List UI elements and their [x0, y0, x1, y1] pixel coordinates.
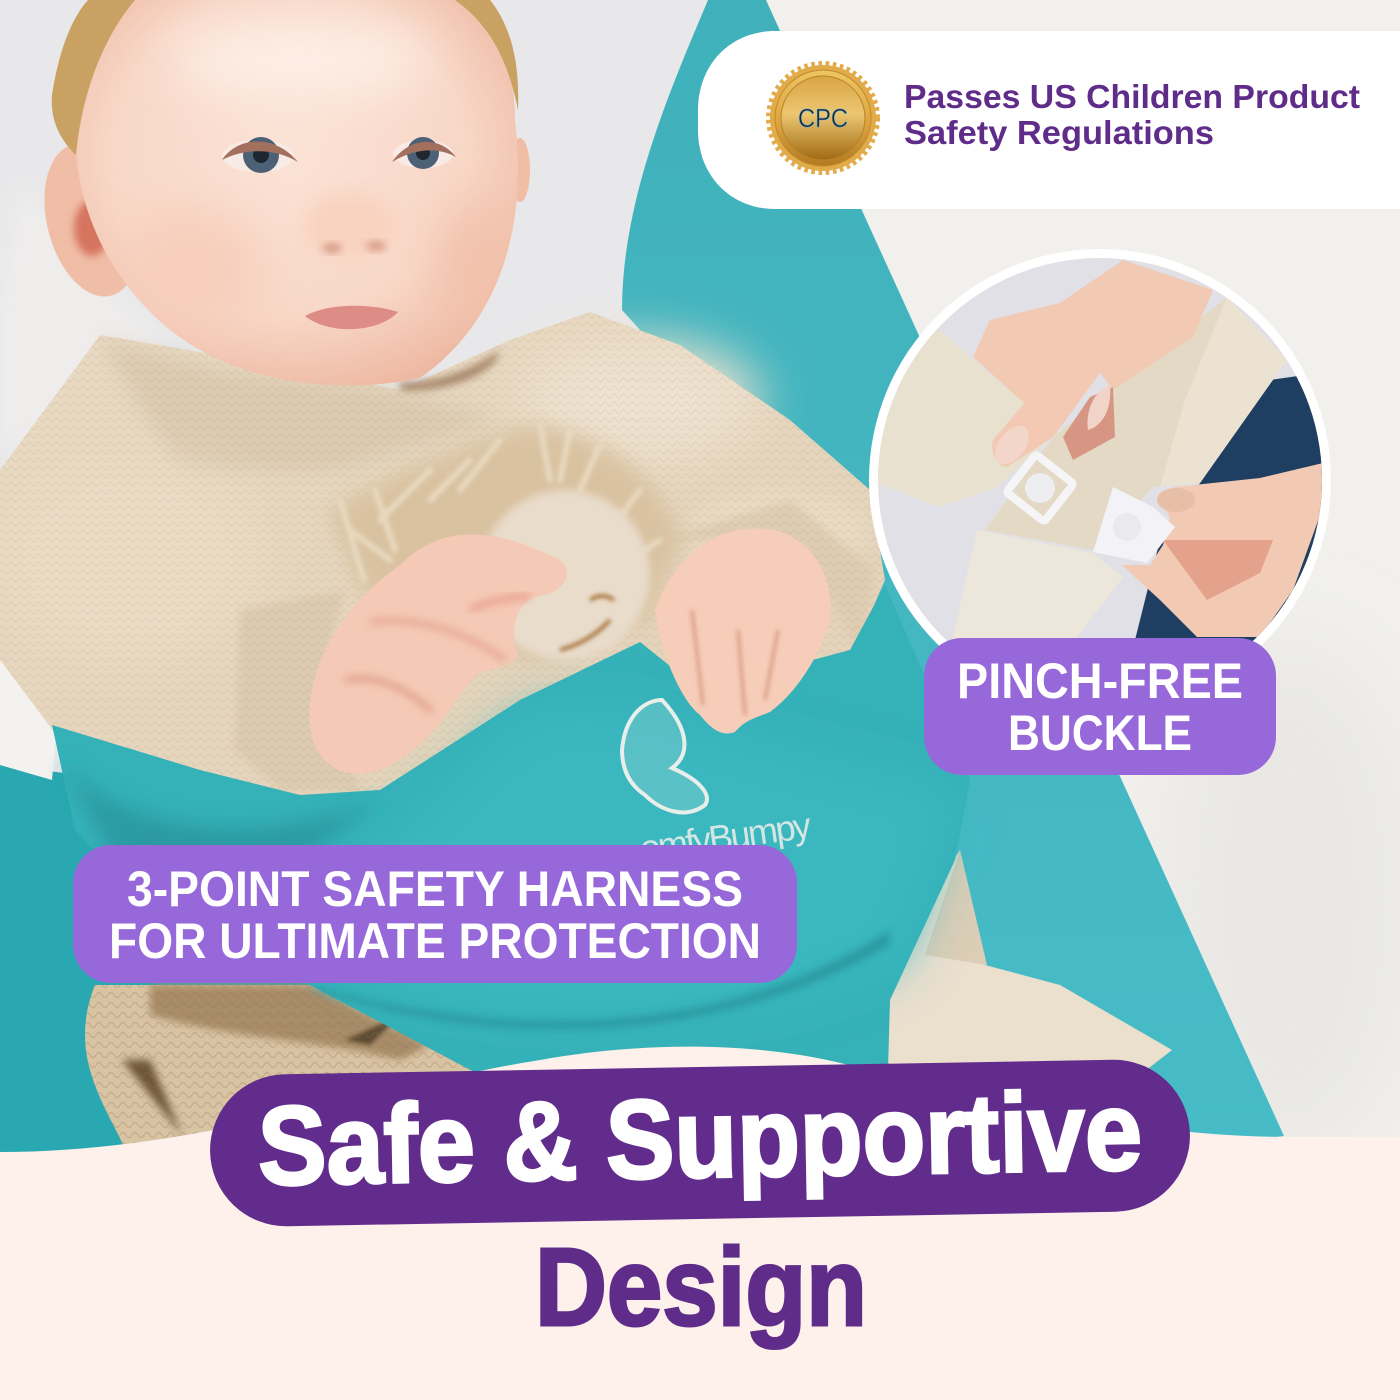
pill: pinch-free buckle: BUCKLE [1008, 705, 1192, 761]
pill: 3-point safety harness: 3-POINT SAFETY HARNESS [127, 861, 743, 917]
inset lower hand [1122, 463, 1323, 637]
inset upper hand [973, 260, 1213, 437]
inset thumb [992, 373, 1100, 467]
pill: 3-point safety harness: FOR ULTIMATE PROTECTION [109, 913, 761, 969]
pill: 3-point safety harness [73, 845, 797, 983]
CPC gold seal: CPC [798, 103, 848, 133]
top right banner [698, 31, 1400, 209]
banner text: Safety Regulations [904, 114, 1214, 151]
lion appliqué on sweater [330, 425, 680, 660]
baby left hand [310, 534, 567, 774]
banner text [904, 78, 1360, 151]
sweater knit texture [0, 312, 885, 795]
sweater shading [0, 340, 875, 790]
teal harness bib [52, 585, 970, 1075]
bib logo [622, 700, 814, 869]
baby right hand [655, 528, 831, 734]
pill: pinch-free buckle: PINCH-FREE [957, 653, 1243, 709]
banner text: Passes US Children Product [904, 78, 1360, 115]
neck shadow [400, 350, 500, 390]
inset cuff [877, 328, 1060, 507]
face features [222, 137, 456, 329]
CPC gold seal [768, 64, 878, 172]
inset clip left [1006, 454, 1074, 522]
bib logo: omfyBumpy [638, 804, 814, 869]
inset navy background [1136, 376, 1322, 641]
inset beige fabric [985, 297, 1287, 550]
headband [52, 0, 518, 155]
photo inset: buckle [869, 249, 1331, 646]
pill: pinch-free buckle [924, 638, 1276, 775]
cream bottom wave [0, 1047, 1400, 1400]
title pill: Safe & Supportive [257, 1068, 1143, 1209]
teal triangle seat [622, 0, 1284, 1160]
harness side strap [0, 660, 58, 780]
title second line: Design [535, 1226, 867, 1349]
baby head [29, 0, 530, 386]
inset clip right [1093, 487, 1175, 563]
baby right leg [888, 850, 1172, 1075]
baby left knit leg [85, 985, 480, 1160]
teal seat lower left [0, 765, 700, 1160]
sweater body [0, 312, 885, 800]
